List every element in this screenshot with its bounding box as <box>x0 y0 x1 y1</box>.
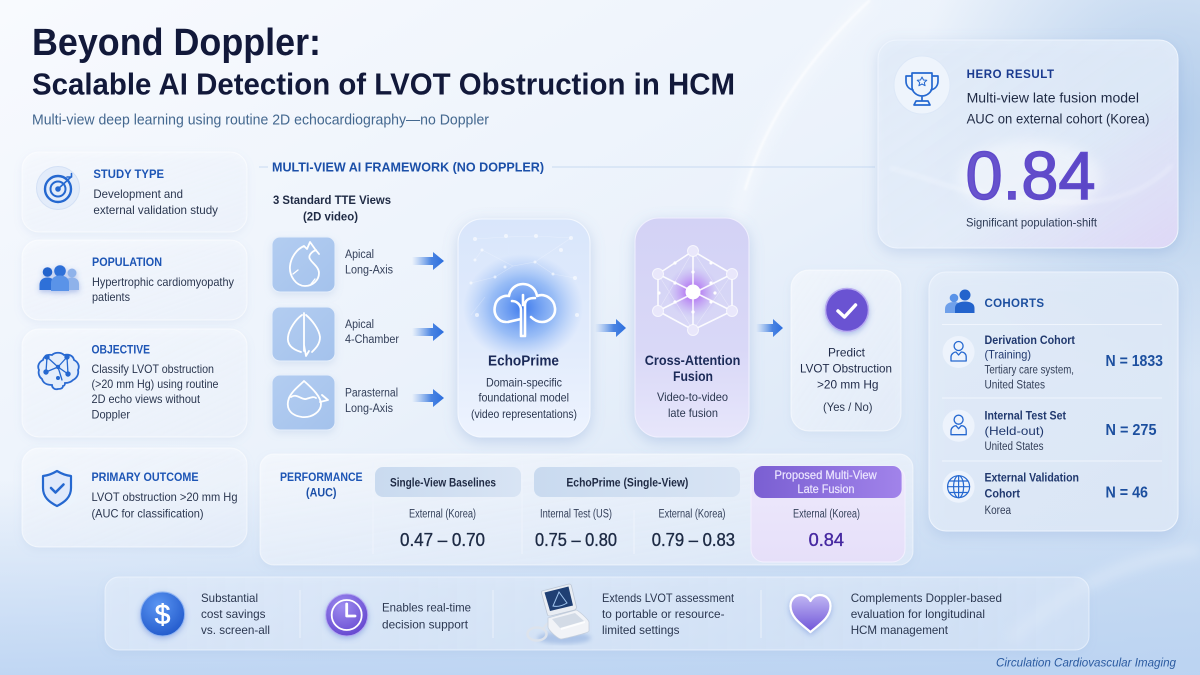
panel: EchoPrime <box>458 219 590 437</box>
hero value: 0.84 <box>966 138 1096 214</box>
panel: EchoPrime: Domain-specific <box>486 376 562 390</box>
heading: three views: (2D video) <box>303 210 358 224</box>
cohort: derivation: United States <box>984 379 1045 391</box>
view: parasternal long-axis: Parasternal <box>345 388 398 400</box>
cohort: external validation: N = 46 <box>1106 484 1148 501</box>
panel: hero result: Significant population-shift <box>966 215 1098 229</box>
cohort: derivation: Tertiary care system, <box>984 364 1074 376</box>
column: EchoPrime single-view: 0.75 – 0.80 <box>535 530 617 550</box>
panel: prediction <box>791 270 901 431</box>
impact: portable settings: to portable or resource- <box>602 607 724 621</box>
arrow <box>412 252 444 270</box>
column: proposed multi-view: External (Korea) <box>793 509 860 521</box>
impact: portable settings <box>528 584 735 644</box>
view: apical 4-chamber <box>272 307 399 361</box>
panel: clinical impact bar <box>105 577 1089 650</box>
view: apical 4-chamber: Apical <box>345 319 374 331</box>
column: proposed multi-view: Late Fusion <box>798 482 854 496</box>
column: proposed multi-view <box>751 466 905 562</box>
panel: hero result: AUC on external cohort (Korea) <box>967 111 1150 126</box>
cohort: derivation: Derivation Cohort <box>984 333 1075 347</box>
panel: EchoPrime: (video representations) <box>471 407 577 421</box>
arrow <box>412 389 444 407</box>
panel: population: POPULATION <box>92 257 162 269</box>
panel: hero result <box>878 40 1178 248</box>
panel: prediction: LVOT Obstruction <box>800 362 892 376</box>
cohort: internal test: Internal Test Set <box>984 408 1066 422</box>
icon: trophy <box>894 56 950 114</box>
cohort: internal test: (Held-out) <box>984 424 1044 438</box>
panel: primary outcome: PRIMARY OUTCOME <box>92 472 199 484</box>
panel: prediction: >20 mm Hg <box>817 378 878 392</box>
panel: cross-attention fusion: late fusion <box>668 406 718 420</box>
column: EchoPrime single-view: 0.79 – 0.83 <box>652 530 735 550</box>
panel: EchoPrime: foundational model <box>478 391 569 405</box>
icon: fusion hexagon network <box>652 246 738 336</box>
column: proposed multi-view: 0.84 <box>809 530 844 550</box>
icon: ultrasound machine <box>528 584 591 644</box>
view: apical long-axis: Long-Axis <box>345 265 393 277</box>
icon: glowing neural tree <box>463 234 583 362</box>
column: EchoPrime single-view <box>534 467 740 550</box>
cohort: internal test: N = 275 <box>1106 422 1157 439</box>
column: single-view baselines: Single-View Baselines <box>390 476 496 490</box>
impact: real-time support: decision support <box>382 618 469 632</box>
panel: EchoPrime: EchoPrime <box>488 353 559 370</box>
panel: study type: STUDY TYPE <box>93 169 164 181</box>
panel: objective: Doppler <box>92 408 130 422</box>
icon: cohort people <box>945 290 974 313</box>
view: apical 4-chamber: 4-Chamber <box>345 334 399 346</box>
panel: cohorts: COHORTS <box>984 298 1044 310</box>
panel: cohorts <box>929 272 1178 531</box>
performance label: (AUC) <box>306 487 337 499</box>
title: Scalable AI Detection of LVOT Obstruction in HCM <box>32 68 735 102</box>
panel: hero result: HERO RESULT <box>967 69 1054 81</box>
panel: cross-attention fusion: Fusion <box>673 368 713 384</box>
icon: heart <box>790 595 830 632</box>
icon: people <box>40 265 79 291</box>
column: proposed multi-view: Proposed Multi-View <box>774 468 877 482</box>
view: parasternal long-axis: Long-Axis <box>345 403 393 415</box>
icon: check badge <box>826 288 868 332</box>
column: EchoPrime single-view: EchoPrime (Single-View) <box>566 476 688 490</box>
panel: cross-attention fusion <box>635 218 749 437</box>
cohort: internal test: United States <box>984 441 1044 453</box>
panel: objective: (>20 mm Hg) using routine <box>92 377 219 391</box>
cohort: internal test <box>943 408 1157 453</box>
impact: longitudinal management <box>790 591 1002 637</box>
column: single-view baselines: External (Korea) <box>409 509 476 521</box>
column: EchoPrime single-view: External (Korea) <box>658 509 726 521</box>
cohort: derivation <box>943 333 1163 391</box>
arrow <box>595 319 626 337</box>
impact: cost savings: Substantial <box>201 591 258 605</box>
cohort: external validation: Cohort <box>984 486 1020 500</box>
icon: target <box>36 166 80 210</box>
heading: three views <box>273 193 391 224</box>
panel: performance <box>260 454 913 565</box>
impact: cost savings: vs. screen-all <box>201 623 270 637</box>
cohort: derivation: (Training) <box>984 348 1031 362</box>
impact: portable settings: limited settings <box>602 623 680 637</box>
title: Beyond Doppler: <box>32 22 321 64</box>
impact: longitudinal management: HCM management <box>851 623 949 637</box>
panel: prediction: Predict <box>828 345 866 359</box>
panel: population: Hypertrophic cardiomyopathy <box>92 275 234 289</box>
panel: objective: Classify LVOT obstruction <box>92 362 214 376</box>
panel: prediction: (Yes / No) <box>823 400 872 414</box>
cohort: external validation <box>943 471 1148 517</box>
impact: real-time support <box>326 594 471 636</box>
icon: dollar coin: $ <box>155 599 171 630</box>
arrow <box>756 319 783 337</box>
panel: cross-attention fusion: Video-to-video <box>657 390 728 404</box>
panel: population: patients <box>92 290 130 304</box>
panel: study type: external validation study <box>93 203 218 217</box>
panel: hero result: Multi-view late fusion model <box>967 91 1139 106</box>
view: apical long-axis: Apical <box>345 249 374 261</box>
framework heading: MULTI-VIEW AI FRAMEWORK (NO DOPPLER) <box>272 160 544 175</box>
heading: three views: 3 Standard TTE Views <box>273 193 391 207</box>
impact: cost savings: cost savings <box>201 607 266 621</box>
panel: objective: 2D echo views without <box>92 392 201 406</box>
panel: primary outcome: (AUC for classification) <box>92 507 204 521</box>
panel: objective: OBJECTIVE <box>92 345 150 357</box>
performance label: PERFORMANCE <box>280 472 363 484</box>
icon: brain network <box>38 353 79 389</box>
panel: primary outcome <box>22 448 247 547</box>
panel: primary outcome: LVOT obstruction >20 mm Hg <box>92 490 238 504</box>
impact: longitudinal management: Complements Doppler-based <box>851 591 1002 605</box>
column: EchoPrime single-view: Internal Test (US) <box>540 509 612 521</box>
impact: cost savings <box>141 591 270 637</box>
arrow <box>412 323 444 341</box>
view: apical long-axis <box>272 237 393 292</box>
panel: study type: Development and <box>93 187 183 201</box>
view: parasternal long-axis <box>272 375 398 430</box>
panel: cross-attention fusion: Cross-Attention <box>645 352 740 368</box>
cohort: derivation: N = 1833 <box>1106 353 1163 370</box>
icon: clock <box>326 594 368 636</box>
source credit: Circulation Cardiovascular Imaging <box>996 658 1177 670</box>
impact: real-time support: Enables real-time <box>382 601 471 615</box>
column: single-view baselines <box>375 467 521 550</box>
panel: objective <box>22 329 247 437</box>
impact: longitudinal management: evaluation for longitudinal <box>851 607 985 621</box>
panel: study type <box>22 152 247 232</box>
subtitle: Multi-view deep learning using routine 2D echocardiography—no Doppler <box>32 112 489 128</box>
performance label <box>280 472 363 499</box>
panel: population <box>22 240 247 320</box>
cohort: external validation: External Validation <box>984 471 1079 485</box>
cohort: external validation: Korea <box>984 505 1012 517</box>
column: single-view baselines: 0.47 – 0.70 <box>400 530 485 550</box>
impact: portable settings: Extends LVOT assessment <box>602 591 735 605</box>
title <box>32 22 735 102</box>
icon: shield <box>35 466 79 510</box>
